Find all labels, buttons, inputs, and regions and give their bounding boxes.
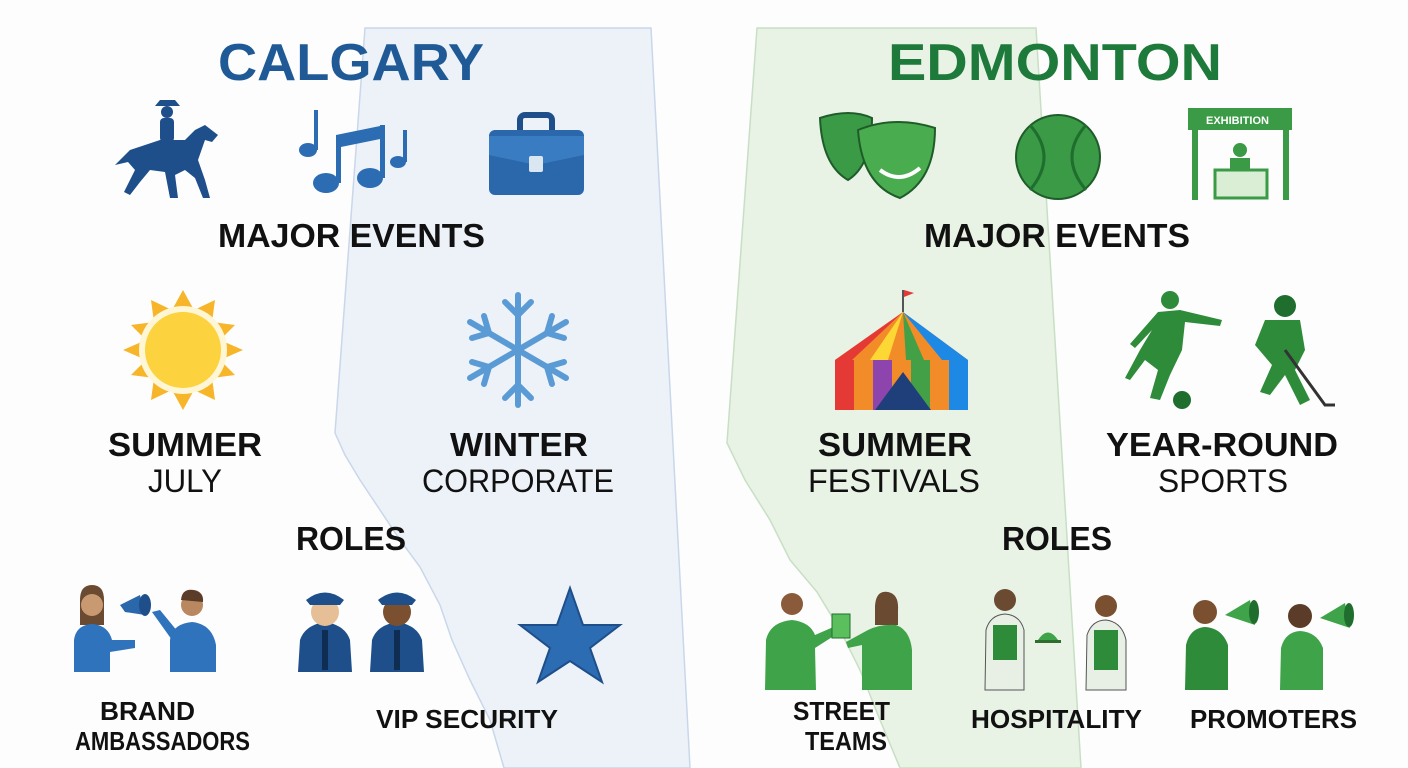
label: promoters: PROMOTERS	[1190, 704, 1357, 734]
label: summer july: SUMMER	[108, 426, 262, 463]
label: year-round sports: SPORTS	[1158, 463, 1288, 499]
title: calgary: CALGARY	[218, 34, 484, 92]
label: brand ambassadors: BRAND	[100, 696, 195, 726]
label: year-round sports	[1106, 426, 1338, 499]
icon: brand ambassadors	[74, 585, 216, 672]
label: brand ambassadors: AMBASSADORS	[75, 726, 250, 756]
icon: exhibition booth	[1188, 108, 1292, 200]
label: street teams: STREET	[793, 696, 890, 726]
label: summer july: JULY	[148, 463, 222, 499]
label: winter corporate: WINTER	[450, 426, 588, 463]
icon: hospitality staff	[985, 589, 1126, 690]
label: summer july	[108, 426, 262, 499]
icon: sun	[123, 290, 243, 410]
icon: circus tent	[835, 290, 968, 410]
heading: calgary major events: MAJOR EVENTS	[218, 217, 485, 254]
icon: snowflake	[470, 295, 566, 405]
label: winter corporate	[422, 426, 614, 499]
label: summer festivals: SUMMER	[818, 426, 972, 463]
label: winter corporate: CORPORATE	[422, 463, 614, 499]
label: street teams	[793, 696, 890, 756]
heading: edmonton major events: MAJOR EVENTS	[924, 217, 1190, 254]
label: summer festivals	[808, 426, 980, 499]
label: brand ambassadors	[75, 696, 250, 756]
title: edmonton: EDMONTON	[888, 34, 1222, 92]
label: street teams: TEAMS	[805, 726, 887, 756]
label: vip security: VIP SECURITY	[376, 704, 558, 734]
heading: calgary roles: ROLES	[296, 520, 406, 557]
icon: security guards	[298, 592, 424, 672]
icon: soccer and hockey players	[1125, 291, 1335, 409]
icon: promoters	[1185, 600, 1354, 690]
icon: horse rider	[115, 100, 218, 198]
heading: edmonton roles: ROLES	[1002, 520, 1112, 557]
icon: ball	[1016, 115, 1100, 199]
icon: exhibition booth: EXHIBITION	[1206, 115, 1269, 127]
icon: theatre masks	[820, 113, 935, 198]
label: year-round sports: YEAR-ROUND	[1106, 426, 1338, 463]
icon: street teams	[765, 592, 912, 690]
label: hospitality: HOSPITALITY	[971, 704, 1142, 734]
map: calgary region	[335, 28, 690, 768]
icon: music notes	[299, 110, 407, 193]
icon: briefcase	[489, 115, 584, 195]
map: edmonton region	[727, 28, 1081, 768]
label: summer festivals: FESTIVALS	[808, 463, 980, 499]
icon: star	[520, 588, 620, 682]
